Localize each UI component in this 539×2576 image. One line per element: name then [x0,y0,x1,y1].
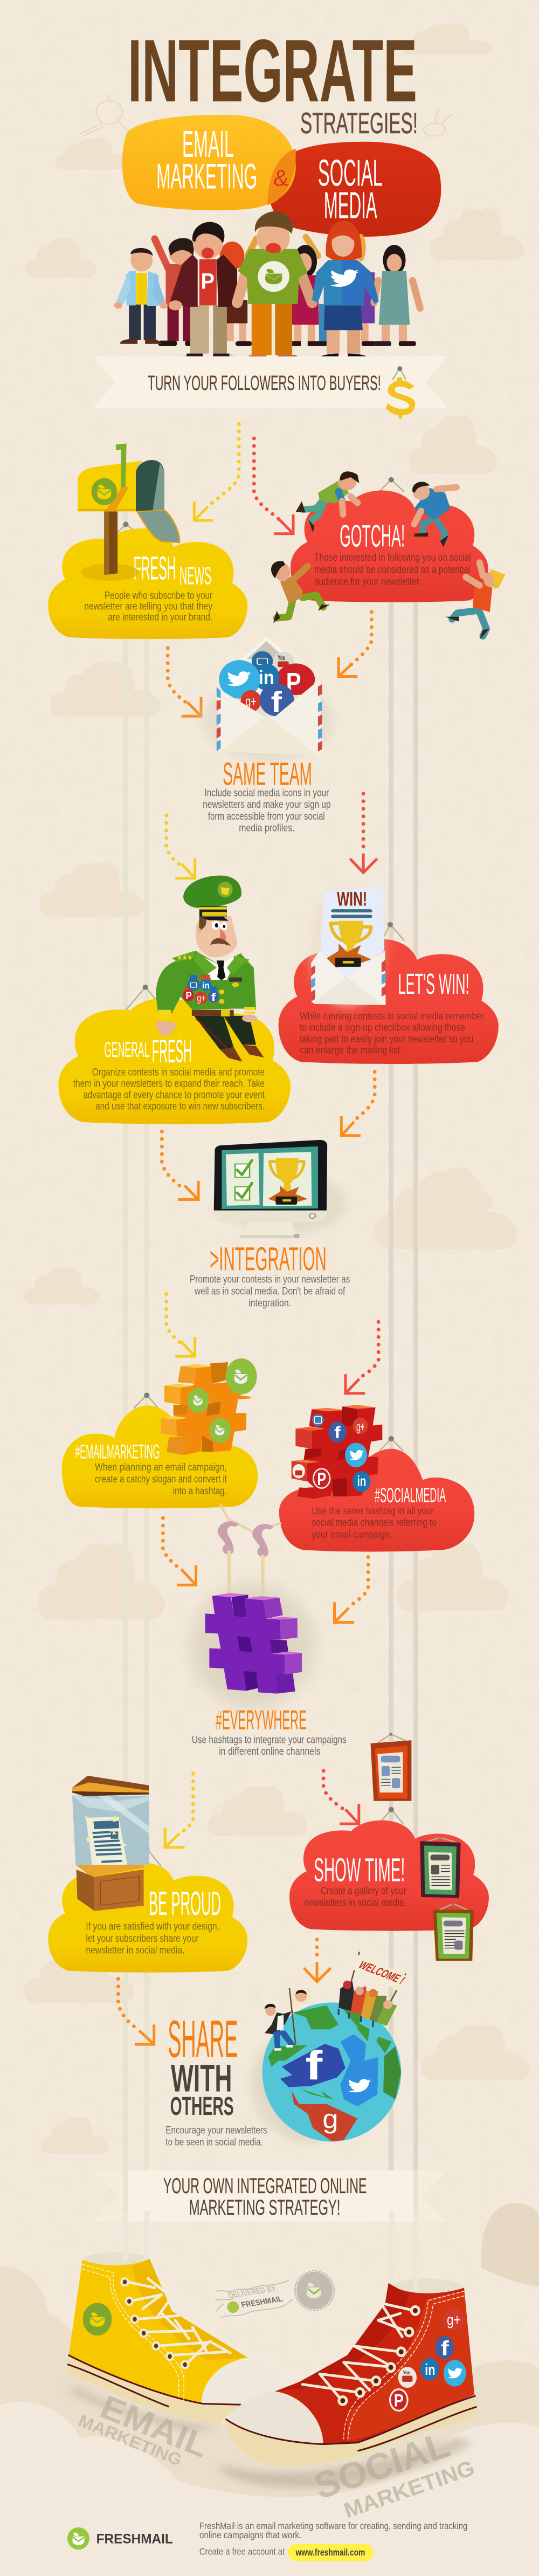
flag man [265,1987,311,2051]
social badges: You [403,2369,410,2375]
panel: everywhere [192,1705,347,1757]
laces [302,2304,420,2406]
body text: them in your newsletters to expand their reach. Take [73,1078,265,1089]
cloud hanger [130,1846,161,1866]
medals: P [185,990,192,1001]
body text: create a catchy slogan and convert it [95,1473,227,1485]
speech bubble: social media: SOCIAL [318,152,383,194]
icon: framed newsletter 2 [420,1836,461,1898]
body text: well as in social media. Don't be afraid of [194,1285,345,1297]
illustration: purple hash [205,1593,302,1694]
body text: media profiles. [239,822,295,834]
speech bubble: email marketing: & [273,166,289,191]
panel text: integration [190,1240,350,1309]
arrow: hash clouds to everywhere (right) [335,1557,368,1622]
social badges [389,2308,466,2412]
arrow: hash clouds to everywhere (left) [163,1518,196,1585]
cloud hanger [383,922,404,940]
body text [84,589,213,623]
climber: top right [412,482,457,547]
infographic canvas: SAME TEAM [223,757,312,792]
body text: Encourage your newsletters [165,2125,267,2137]
delivered by freshmail stamp: DELIVERED BY [227,2284,278,2300]
arrow: email to fresh news [194,424,239,520]
social badges: P [394,2390,404,2410]
panel: general fresh [58,876,291,1124]
floor text: email marketing: EMAIL [95,2388,213,2465]
body text: form accessible from your social [208,810,325,822]
panel: let's win [279,886,499,1064]
welcome banner crowd: WELCOME ! [356,1959,408,1987]
cloud hanger [379,1807,403,1823]
body text [304,1885,406,1908]
illustration: winner envelope: WIN! [337,888,367,910]
panel: fresh news: FRESH [133,549,176,587]
illustration: globe with social continents: f [305,2042,323,2088]
banner: turn your followers into buyers [93,356,448,408]
panel: email marketing hashtag: #EMAILMARKETING [75,1440,160,1463]
cloud hanger [378,477,404,493]
illustration: orange hash [161,1358,257,1455]
panel: integration [214,1140,347,1238]
crowd of followers [114,211,420,363]
arrow: social to gotcha [254,438,293,534]
body text: People who subscribe to your [105,589,212,601]
footer: website button [288,2544,373,2561]
character: general with medals: ★★★ [177,953,192,962]
figure: twitter girl [312,221,379,360]
heading: GENERAL [104,1038,149,1062]
illustration: hands holding the hanging hash [218,1506,280,1617]
body text: If you are satisfied with your design, [86,1921,219,1932]
hanging straps: email side [123,510,149,2284]
strap overlays on banner [123,2170,418,2292]
faint background clouds [24,24,531,2153]
footer: description text: Create a free account at [199,2546,285,2557]
illustration: display case [72,1776,149,1911]
shoe shadows [72,2383,471,2488]
body text: social media channels referring to [312,1516,437,1528]
laces [120,2277,230,2369]
body text: When planning an email campaign, [95,1461,227,1473]
icon: mailbox [78,443,179,581]
panel: gotcha [271,471,506,640]
illustration: envelope full of social icons: You [278,655,285,662]
icon: hanging dollar sign [386,366,415,419]
medals [183,975,219,1004]
cloud hanger [126,985,155,1011]
body text: your email campaign. [312,1529,392,1541]
cloud hanger [380,1436,403,1451]
body text [86,1921,219,1956]
doodle birds [81,95,452,136]
body text [165,2125,267,2148]
figure: pinterest man: P [201,269,215,294]
floor text: email marketing: MARKETING [75,2411,185,2470]
arrow: everywhere to be proud [165,1774,193,1847]
footer: description text: online campaigns that work. [199,2530,301,2540]
social badges: g+ [447,2311,461,2328]
medals: in [202,980,210,991]
figure: blue jacket man [114,248,168,344]
illustration: envelope full of social icons: P [286,668,301,697]
body text [95,1461,227,1497]
body text: newsletters in social media. [304,1897,406,1908]
body text: let your subscribers share your [86,1933,199,1945]
infographic canvas: #EVERYWHERE [216,1705,307,1735]
heading [168,2009,238,2120]
illustration: envelope full of social icons: f [271,685,282,718]
body text [73,1067,265,1112]
climber: top left [295,471,359,533]
delivered by freshmail stamp [216,2271,334,2318]
climber: left [271,561,330,623]
body text [192,1734,347,1757]
illustration: envelope full of social icons [203,636,334,761]
speech bubble: email marketing: MARKETING [156,156,257,196]
illustration: red hash: P [317,1469,326,1489]
arrow: integration to social media hashtag [345,1322,378,1393]
panel: share with others: WITH [171,2057,232,2100]
medals: f [211,991,216,1004]
body text: integration. [248,1297,291,1309]
bottom tan clouds behind the shoes [0,2203,539,2576]
panel: share with others: OTHERS [170,2091,234,2120]
figure: pinterest man [169,222,238,360]
footer: website button: www.freshmail.com [295,2547,365,2558]
arrow: show time to share [304,1940,331,1982]
shadow behind purple hash [190,1584,314,1708]
body text: into a hashtag. [173,1485,227,1497]
illustration: envelope full of social icons: in [259,667,274,688]
illustration: red hash: g+ [356,1419,364,1433]
banner: your own integrated online marketing strategy [92,2170,448,2222]
arrow: let's win to integration [341,1072,375,1136]
body text: Create a gallery of your [321,1885,406,1897]
body text: Promote your contests in your newsletter as [190,1274,350,1285]
illustration: red hash: f [334,1424,341,1442]
social badges: in [425,2361,435,2378]
infographic canvas: BE PROUD [149,1885,221,1922]
panel: social media hashtag [279,1436,474,1551]
figure: right girl [374,245,420,346]
panel: be proud [48,1776,247,1973]
illustration: red hash [292,1405,382,1499]
character: general with medals [156,876,264,1062]
speech bubble: email marketing: EMAIL [182,122,234,165]
icon: framed newsletter 3 [433,1902,474,1961]
arrow: general fresh to integration [162,1131,198,1200]
icon: framed newsletter 1 [371,1733,411,1801]
body text: Use the same hashtag in all your [312,1505,434,1517]
body text: Include social media icons in your [204,787,329,799]
social badges: f [441,2337,450,2360]
cloud hanger [116,521,137,534]
panel: same team [203,636,334,834]
floor text: social marketing: SOCIAL [309,2424,454,2507]
body text: Organize contests in social media and promote [92,1067,265,1079]
panel: share with others [165,1953,408,2148]
cloud hanger [134,1393,158,1408]
body text: can enlarge the mailing list. [300,1045,402,1056]
floor text: social marketing: MARKETING [341,2456,478,2523]
body text: newsletter in social media. [86,1944,184,1956]
heading [104,1033,192,1069]
body text: and use that exposure to win new subscribers. [95,1101,265,1112]
panel: general fresh: FRESH [152,1033,192,1069]
arrow: gotcha to same team [338,612,371,676]
body text: advantage of every chance to promote your event [83,1089,265,1101]
panel: gotcha: GOTCHA! [340,518,405,553]
arrow: be proud to share [118,1979,154,2044]
speech bubble: email marketing [122,115,296,210]
body text: in different online channels [219,1746,320,1757]
panel: fresh news [48,443,247,639]
figure: center man with freshmail shirt [237,211,312,363]
illustration: winner envelope [309,886,386,1009]
body text: newsletters and make your sign up [203,799,331,810]
heading [133,549,211,590]
welcome banner crowd [338,1953,408,2027]
speech bubble: social media: MEDIA [324,184,377,226]
delivered by freshmail stamp: FRESHMAIL [240,2294,284,2309]
yellow sneaker: email marketing [68,2211,287,2424]
hanging straps: social side [389,510,418,2290]
speech bubble: social media [269,142,441,237]
panel: show time [289,1733,489,1961]
body text [300,1011,484,1056]
body text: are interested in your brand. [108,611,212,623]
arrow: fresh news to same team [168,648,201,716]
medals: g+ [197,992,205,1004]
panel: fresh news: NEWS [179,562,211,590]
climber: right [445,562,506,640]
red sneaker: social media [225,2211,476,2466]
illustration: envelope full of social icons: g+ [245,693,257,709]
arrow: same team to general fresh [167,815,195,878]
body text: to be seen in social media. [165,2137,263,2148]
illustration: red hash: in [357,1473,366,1489]
illustration: monitor with trophy [214,1140,347,1238]
arrow: to let's win [350,794,377,873]
panel: share with others: SHARE [168,2009,238,2069]
arrow: integration to email marketing hashtag [167,1294,195,1356]
body text [190,1274,350,1309]
arrow: everywhere to show time [323,1771,359,1824]
footer: freshmail logo: FRESHMAIL [96,2531,173,2546]
body text: newsletter are telling you that they [84,600,213,612]
subtitle: STRATEGIES! [300,106,418,140]
body text [314,552,471,587]
body text [312,1505,437,1541]
body text [203,787,331,834]
back row figures [155,234,375,346]
body text: audience for your newsletter. [314,575,421,587]
footer: freshmail logo [67,2527,173,2550]
body text: Use hashtags to integrate your campaigns [192,1734,347,1746]
footer: description text [199,2520,467,2557]
illustration: globe with social continents [251,1953,408,2142]
panel: email marketing hashtag [62,1393,258,1508]
illustration: globe with social continents: g [322,2104,338,2134]
